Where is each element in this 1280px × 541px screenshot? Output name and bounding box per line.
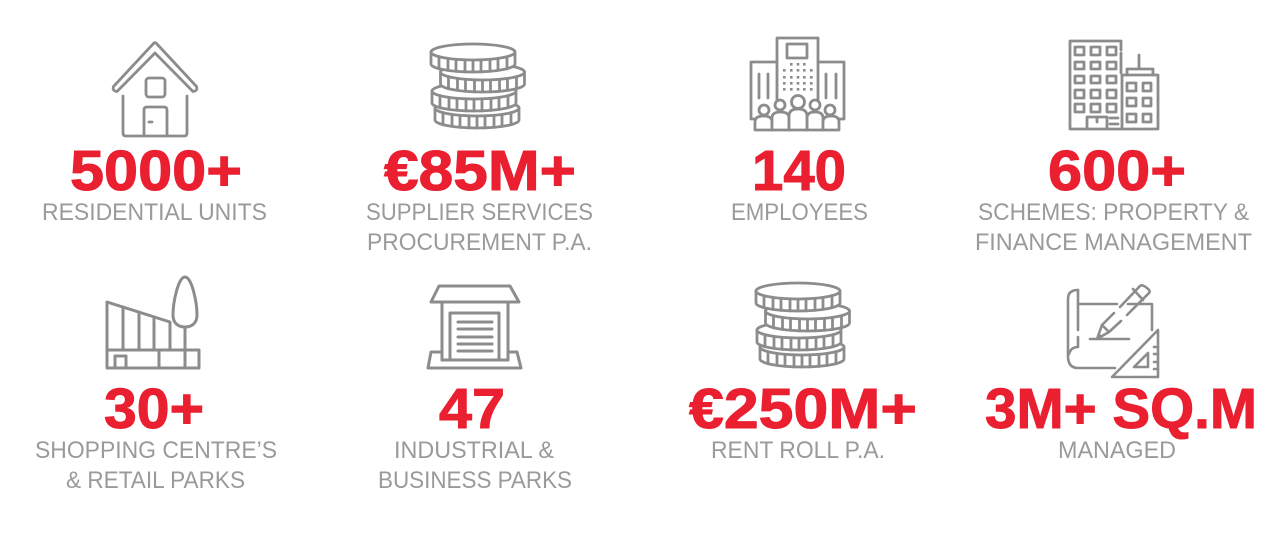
label: schemes property and finance management: FINANCE MANAGEMENT xyxy=(975,229,1252,256)
number: 3M+ sq.m: 3M+ SQ.M xyxy=(985,377,1257,441)
label: shopping centres and retail parks xyxy=(35,437,277,494)
stat: rent roll xyxy=(689,283,917,464)
label: supplier services procurement: SUPPLIER SERVICES xyxy=(366,199,593,226)
stat: employees xyxy=(731,38,868,226)
label: schemes property and finance management: SCHEMES: PROPERTY & xyxy=(978,199,1249,226)
icon: coin stack xyxy=(756,283,850,367)
label: schemes property and finance management xyxy=(975,199,1252,256)
stat: industrial parks xyxy=(378,286,572,494)
number: 85M+: €85M+ xyxy=(384,139,576,203)
icon: coin stack xyxy=(431,44,524,128)
label: industrial and business parks: INDUSTRIAL & xyxy=(394,437,554,464)
label: supplier services procurement: PROCUREMENT P.A. xyxy=(367,229,592,256)
icon: blueprint, pencil and set square xyxy=(1068,285,1158,377)
icon: warehouse xyxy=(428,286,521,368)
stat: residential units xyxy=(42,43,267,226)
label: shopping centres and retail parks: SHOPPING CENTRE’S xyxy=(35,437,277,464)
label: rent roll: RENT ROLL P.A. xyxy=(711,437,885,464)
number: 250M+: €250M+ xyxy=(689,377,917,441)
label: residential units: RESIDENTIAL UNITS xyxy=(42,199,267,226)
icon: apartment buildings xyxy=(1070,41,1158,129)
stat: supplier services xyxy=(366,44,593,256)
number: 30+: 30+ xyxy=(104,377,204,441)
icon: office towers and people xyxy=(751,38,844,130)
icon: house xyxy=(113,43,197,136)
label: managed: MANAGED xyxy=(1058,437,1176,464)
label: industrial and business parks: BUSINESS PARKS xyxy=(378,467,572,494)
label: shopping centres and retail parks: & RETAIL PARKS xyxy=(66,467,245,494)
label: industrial and business parks xyxy=(378,437,572,494)
label: employees: EMPLOYEES xyxy=(731,199,868,226)
stat: square metres managed xyxy=(985,285,1257,464)
stat: schemes xyxy=(975,41,1252,256)
number: 5000+: 5000+ xyxy=(70,139,242,203)
number: 600+: 600+ xyxy=(1048,139,1186,203)
label: supplier services procurement xyxy=(366,199,593,256)
number: 47: 47 xyxy=(439,377,505,441)
stat: shopping centres xyxy=(35,277,277,494)
number: 140: 140 xyxy=(752,139,846,203)
icon: retail park with tree xyxy=(107,277,199,368)
